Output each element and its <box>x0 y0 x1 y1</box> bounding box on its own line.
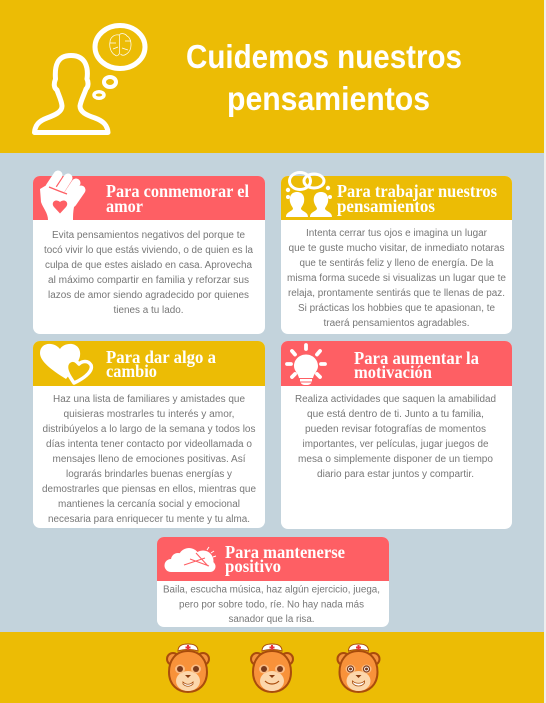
heading: cambio <box>106 361 157 381</box>
heading <box>106 347 216 381</box>
text block: tocó vivir lo que estás viviendo, o de quien es la <box>44 245 254 256</box>
text block: mantienes la cercanía social y emocional <box>58 499 240 510</box>
panel: para conmemorar el amor <box>33 175 265 334</box>
icon: nurse mascot right <box>338 644 380 692</box>
text block: demostrarles que piensas en ellos, mientras que <box>42 484 257 495</box>
panel: para dar algo a cambio <box>33 341 265 528</box>
text block: importantes, ver películas, jugar juegos de <box>302 439 489 450</box>
text block: que te guste mucho visitar, de inmediato notaras <box>288 243 505 254</box>
icon: raised fist with heart <box>40 175 81 220</box>
text block: lazos de amor siendo agradecido por quienes <box>48 290 249 301</box>
heading <box>337 181 497 216</box>
text block <box>295 394 496 480</box>
text block: relaja, prontamente sentirás que te llenas de paz. <box>288 288 505 299</box>
panel: para mantenerse positivo <box>157 537 389 627</box>
heading: Para trabajar nuestros <box>337 181 497 201</box>
text block: misma forma sucede si visualizas un lugar que te <box>287 273 507 284</box>
text block: culpa de que estes aislado en casa. Aprovecha <box>45 260 253 271</box>
heading <box>354 348 479 382</box>
text block: traerá pensamientos agradables. <box>324 318 470 329</box>
text block: lograrás brindarles buenas energías y <box>66 469 232 480</box>
icon: person thinking <box>34 26 145 132</box>
text block: Si prácticas los hobbies que te apasionan, te <box>298 303 496 314</box>
heading <box>225 542 345 576</box>
title <box>186 38 462 117</box>
title: pensamientos <box>227 80 430 117</box>
icon: two hearts <box>40 344 91 383</box>
text block: sanador que la risa. <box>228 614 314 625</box>
text block <box>44 230 254 316</box>
heading: Para conmemorar el <box>106 181 249 201</box>
icon: nurse mascot left <box>167 644 209 692</box>
text block: que está dentro de ti. Junto a tu familia, <box>307 409 484 420</box>
header band <box>0 0 544 153</box>
text block: diario para estar juntos y compartir. <box>317 469 474 480</box>
text block: distribúyelos a lo largo de la semana y todos los <box>42 424 256 435</box>
heading: pensamientos <box>337 196 435 216</box>
text block: Intenta cerrar tus ojos e imagina un lugar <box>306 228 488 239</box>
panel: para trabajar nuestros pensamientos <box>281 172 512 334</box>
text block: mesa o simplemente disponer de un tiempo <box>298 454 494 465</box>
icon: two people with thought bubbles <box>286 172 332 217</box>
text block: al máximo compartir en familia y reforzar sus <box>48 275 249 286</box>
text block: mensajes lleno de emociones positivas. Así <box>52 454 246 465</box>
text block: Haz una lista de familiares y amistades que <box>53 394 246 405</box>
text block: tienes a tu lado. <box>114 305 184 316</box>
text block: Realiza actividades que saquen la amabilidad <box>295 394 496 405</box>
text block: Baila, escucha música, haz algún ejercicio, juega, <box>163 584 380 596</box>
icon: nurse mascot center <box>251 644 293 692</box>
heading: amor <box>106 196 143 216</box>
heading: Para mantenerse <box>225 542 345 562</box>
title: Cuidemos nuestros <box>186 38 462 75</box>
text block: pueden revisar fotografías de momentos <box>305 424 486 435</box>
text block: Evita pensamientos negativos del porque te <box>52 230 246 241</box>
text block: que te sentirás feliz y lleno de energía. De la <box>300 258 494 269</box>
heading <box>106 181 249 216</box>
text block <box>287 228 507 329</box>
icon: light bulb <box>287 345 325 385</box>
text block: quisieras mostrarles tu interés y amor, <box>64 409 234 420</box>
icon: cloud and sun <box>164 547 216 572</box>
heading: motivación <box>354 362 432 382</box>
footer band <box>0 632 544 703</box>
heading: positivo <box>225 556 281 576</box>
text block <box>163 584 380 625</box>
panel: para aumentar la motivación <box>281 341 512 529</box>
text block: días intenta tener contacto por videollamada o <box>46 439 253 450</box>
text block: necesaria para enriquecer tu mente y tu alma. <box>48 514 250 525</box>
heading: Para dar algo a <box>106 347 216 367</box>
text block: pero por sobre todo, ríe. No hay nada más <box>179 600 364 610</box>
heading: Para aumentar la <box>354 348 479 368</box>
text block <box>42 394 257 525</box>
